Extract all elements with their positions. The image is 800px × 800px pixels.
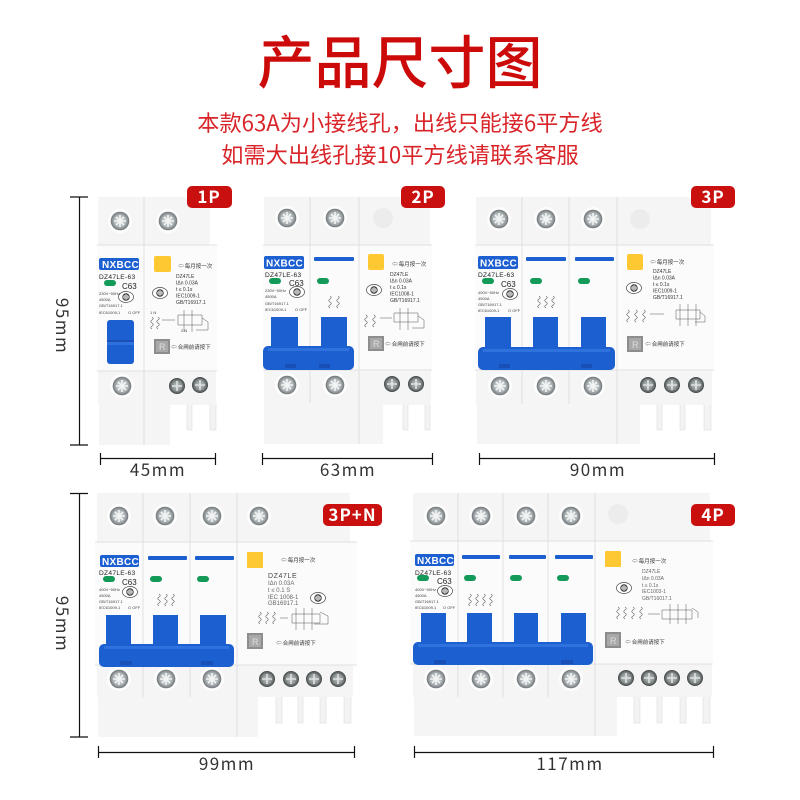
3P+N left label [99,570,141,610]
3P left label: O OFF [508,308,521,313]
3P left label: 4500A [478,296,490,301]
3P+N wiring diagram [259,608,328,630]
3P+N pole markings [148,556,234,606]
2P left label: 4500A [265,294,277,299]
3P+N left label: 4500A [99,593,111,598]
2P right label: ⇦ 每月按一次 [392,260,427,268]
3P left label: DZ47LE-63 [478,272,514,279]
4P left label: 4500A [415,593,427,598]
1P left label: C63 [122,282,137,291]
4P left label: O OFF [443,605,456,610]
3P right label: GB/T16917.1 [653,295,683,301]
4P right label: GB/T16017.1 [642,596,672,602]
4P wiring diagram [617,604,698,624]
dimension: 1P height 95mm [51,197,88,445]
badge: 3P: 3P [701,183,725,208]
3P logo: NXBCC [480,258,517,270]
dimension: 1P width 45mm: 45mm [130,456,186,481]
1P blue handle [107,320,134,364]
4P reset button [605,632,665,648]
product: 3P+N breaker [95,493,357,737]
2P right label: IEC1008-1 [390,292,414,298]
dimension: 4P width 117mm: 117mm [536,750,604,775]
3P+N right label: t ≤ 0.1 S [268,588,290,594]
2P left label: C63 [289,279,304,288]
2P second pole markings [314,257,354,308]
3P+N right label: DZ47LE [268,573,297,580]
dimension: 1P width 45mm [100,453,216,481]
2P reset button: ⇦ 合闸前请按下 [385,340,425,348]
2P wiring diagram [365,308,424,330]
2P right label: GB/T16917.1 [390,298,420,304]
3P+N left label: DZ47LE-63 [99,570,135,577]
2P right label [366,260,427,304]
3P blue handle [478,317,615,370]
3P+N right label: IΔn 0.03A [268,581,294,587]
2P left label: DZ47LE-63 [265,272,301,279]
4P test button [605,551,621,567]
4P pole markings [462,555,593,606]
4P left label: GB/T16917.1 [415,599,440,604]
1P screws [108,209,208,398]
1P right label: IEC1009-1 [176,294,200,300]
3P+N left label: 400V~50Hz [99,587,120,592]
4P right label: t ≤ 0.1s [642,583,659,589]
2P left label: IEC61009-1 [265,307,287,312]
2P left label: 230V~50Hz [265,288,286,293]
2P right label: t ≤ 0.1s [390,285,407,291]
4P left label: IEC61009-1 [415,605,437,610]
product: 2P breaker [263,197,432,444]
subtitle text: 本款63A为小接线孔，出线只能接6平方线 [197,106,603,138]
2P reset button: R [373,339,380,349]
3P+N logo: NXBCC [102,557,139,568]
3P left label: C63 [501,280,516,289]
dimension: 4P width 117mm [414,746,714,775]
dimension: 3P width 90mm: 90mm [570,456,626,481]
dimension: 1P height 95mm: 95mm [51,298,76,354]
1P logo: NXBCC [102,260,139,271]
dimension: 3P+N height 95mm: 95mm [51,596,76,652]
3P+N left label: C63 [122,578,137,587]
dimension: 3P+N height 95mm [51,494,88,737]
2P test button [368,254,384,270]
3P+N left label: O OFF [128,605,141,610]
4P right label: ⇦ 每月按一次 [632,557,667,565]
4P right label: IΔn 0.03A [642,576,665,582]
product: 4P breaker [410,493,713,736]
3P wiring diagram [627,304,705,326]
3P reset button: ⇦ 合闸前请按下 [645,340,685,348]
3P+N screws [107,504,346,691]
4P right label: IEC1003-1 [642,589,666,595]
1P reset button: ⇦ 合闸前请按下 [171,343,211,351]
3P right label [626,258,685,301]
badge: 2P [401,183,445,208]
3P pole markings [526,257,614,308]
1P reset button: R [159,342,166,352]
1P right label: ⇦ 每月按一次 [178,262,213,270]
3P reset button: R [632,340,639,350]
title: 产品尺寸图 [258,18,542,100]
4P left label [415,570,456,610]
3P+N test button [247,552,263,568]
4P right label [616,557,672,602]
1P left label: 230V~50Hz [99,291,120,296]
dimension: 2P width 63mm [262,453,432,481]
4P logo: NXBCC [417,556,454,567]
3P right label: IΔn 0.03A [653,276,676,282]
dimension: 2P width 63mm: 63mm [320,456,376,481]
dimension: 3P+N width 99mm [98,746,354,775]
1P right label: IΔn 0.03A [176,280,199,286]
3P+N left label: GB/T16917.1 [99,599,124,604]
3P+N left label: IEC61009-1 [99,605,121,610]
1P housing [97,197,217,445]
3P reset button [627,336,685,352]
2P reset button [368,336,425,351]
1P left label: O OFF [128,310,141,315]
3P+N reset button: R [252,637,259,647]
3P left label: 400V~50Hz [478,290,499,295]
2P right label: DZ47LE [390,272,409,278]
4P blue handle [413,613,593,665]
3P+N right label: ⇦ 每月按一次 [281,556,316,564]
3P left label: IEC61009-1 [478,308,500,313]
1P right label: t ≤ 0.1s [176,287,193,293]
1P right label: GB/T16917.1 [176,300,206,306]
badge: 1P: 1P [197,183,221,208]
2P screws [275,206,424,397]
2P right label: IΔn 0.03A [390,278,413,284]
3P screws [487,207,704,398]
4P right label: DZ47LE [642,569,661,575]
4P left label: DZ47LE-63 [415,570,451,577]
4P housing [410,493,713,736]
3P right label: DZ47LE [653,269,672,275]
badge: 4P [691,501,735,526]
2P logo: NXBCC [266,258,303,270]
1P wiring diagram: 2 N [181,328,187,333]
subtitle text: 如需大出线孔接10平方线请联系客服 [221,138,579,170]
1P wiring diagram [150,310,208,333]
1P left label: DZ47LE-63 [99,274,135,281]
3P housing [475,197,714,444]
4P reset button: ⇦ 合闸前请按下 [625,638,665,646]
1P right label [152,262,213,306]
2P left label: GB/T16917.1 [265,301,290,306]
dimension: 3P+N width 99mm: 99mm [199,750,255,775]
badge: 1P [187,183,232,208]
2P left label [265,272,308,312]
1P left label: GB/T16917.1 [99,303,124,308]
3P right label: IEC1009-1 [653,288,677,294]
3P+N blue handle [99,615,234,667]
product: 1P breaker [97,197,217,445]
3P+N housing [95,493,357,737]
1P test button [154,256,171,272]
3P+N right label: GB16917.1 [268,601,299,607]
badge: 2P: 2P [411,183,435,208]
4P left label: 400V~50Hz [415,587,436,592]
badge: 4P: 4P [701,501,725,526]
product: 3P breaker [475,197,714,444]
3P left label: GB/T16917.1 [478,302,503,307]
3P right label: t ≤ 0.1s [653,282,670,288]
2P housing [263,197,432,444]
1P wiring diagram: 1 N [150,310,156,315]
2P left label: O OFF [295,307,308,312]
3P right label: ⇦ 每月按一次 [650,258,685,266]
3P+N right label [268,556,326,607]
3P test button [627,254,643,270]
1P left label [99,274,141,315]
3P+N right label: IEC 1008-1 [268,595,299,601]
2P blue handle [263,317,354,370]
1P reset button [154,339,211,354]
subtitle text [197,106,603,170]
4P reset button: R [610,636,617,646]
4P screws [424,504,703,691]
1P right label: DZ47LE [176,274,195,280]
1P left label: IEC61009-1 [99,310,121,315]
1P left label: 4500A [99,297,111,302]
dimension: 3P width 90mm [480,453,714,481]
badge: 3P+N: 3P+N [328,501,377,526]
badge: 3P [691,183,735,208]
3P left label [478,272,521,313]
4P left label: C63 [437,577,452,586]
3P+N reset button [247,633,316,649]
3P+N reset button: ⇦ 合闸前请按下 [276,639,316,647]
